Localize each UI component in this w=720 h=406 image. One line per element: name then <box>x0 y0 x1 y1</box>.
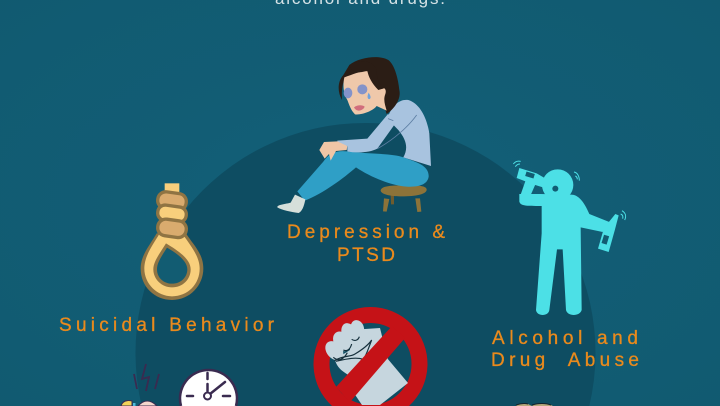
hair back <box>339 57 400 114</box>
eyes and tear <box>344 88 352 98</box>
label: depression: PTSD <box>337 245 395 266</box>
label: suicidal behavior: Suicidal Behavior <box>59 315 275 336</box>
sweater torso <box>387 100 431 166</box>
sweater arm <box>337 114 397 152</box>
second bottle <box>598 214 619 252</box>
icon: no violence fist <box>314 307 428 406</box>
prohibition bar <box>336 326 405 402</box>
icon: clock <box>180 370 237 406</box>
body and legs <box>519 194 609 315</box>
raised arm <box>519 177 537 198</box>
icon: noose <box>141 183 203 300</box>
label: alcohol and drug abuse: Alcohol and <box>492 328 638 349</box>
face <box>343 71 387 114</box>
hand <box>319 141 347 161</box>
icon: depressed woman on stool <box>277 57 431 213</box>
label: depression <box>287 222 445 266</box>
label: depression: Depression & <box>287 222 445 243</box>
drinking bottle <box>517 168 558 191</box>
central dark circle <box>135 123 595 406</box>
label: alcohol and drug abuse: Drug Abuse <box>491 350 639 371</box>
label: alcohol and drug abuse <box>491 328 639 371</box>
head <box>542 169 573 201</box>
mouth <box>354 105 365 111</box>
stool <box>381 185 427 212</box>
icon: bottom right fragment <box>516 404 553 406</box>
motion marks <box>513 161 626 220</box>
pants <box>297 151 429 201</box>
coils <box>157 191 187 239</box>
loop <box>141 233 203 300</box>
icon: man drinking <box>513 161 626 315</box>
prohibition ring <box>314 307 428 406</box>
fist <box>322 319 388 383</box>
icon: stressed person top <box>121 364 159 406</box>
arm <box>345 358 408 405</box>
foot <box>277 195 305 213</box>
hair fringe <box>349 61 384 90</box>
